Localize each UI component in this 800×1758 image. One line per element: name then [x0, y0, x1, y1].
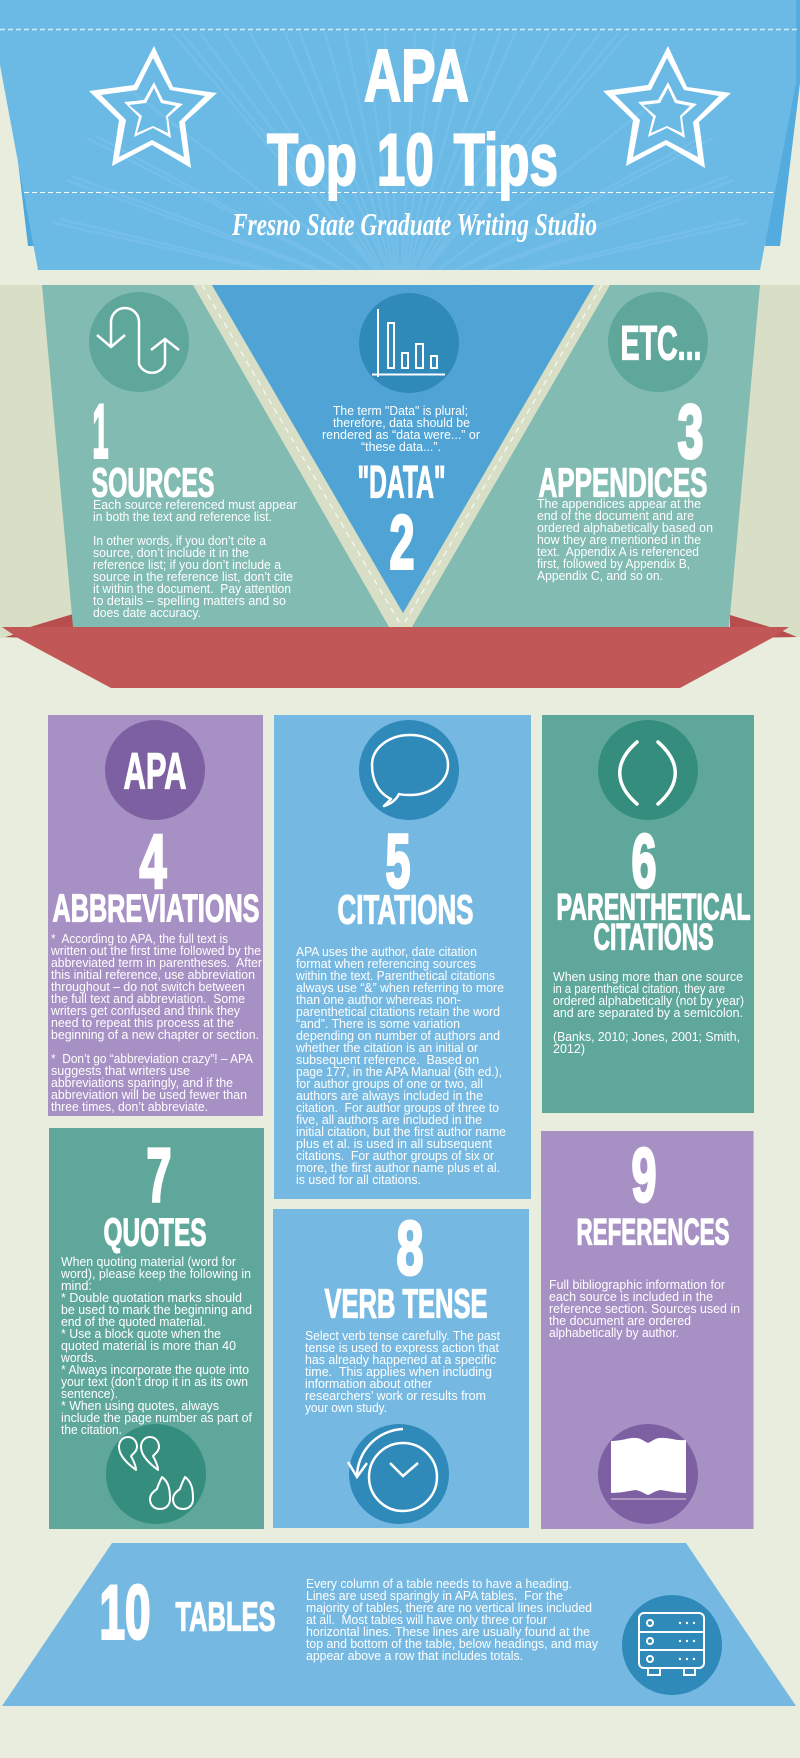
title: APA: APA	[364, 34, 469, 117]
text: abbreviations body: abbreviated term in parentheses. After	[51, 955, 263, 970]
number 4: 4	[140, 820, 166, 904]
title: Top 10 Tips: Top 10 Tips	[267, 120, 558, 201]
text: citations body: parenthetical citations retain the word	[296, 1004, 500, 1019]
text: parenthetical body: ordered alphabetically (not by year)	[553, 993, 744, 1008]
icon: right star	[603, 46, 731, 168]
text: abbreviations body: * Don’t go “abbreviation crazy”! – APA	[51, 1051, 253, 1066]
text: verb tense body: Select verb tense carefully. The past	[305, 1328, 500, 1343]
text: appendices body: end of the document and are	[537, 508, 694, 523]
heading: citations: CITATIONS	[338, 886, 474, 932]
text: references body: reference section. Sources used in	[549, 1301, 740, 1316]
heading: abbreviations: ABBREVIATIONS	[52, 888, 260, 930]
icon: clock with arrow	[348, 1424, 449, 1524]
text: quotes body: When quoting material (word for	[61, 1254, 237, 1269]
text: appendices body: The appendices appear at the	[537, 496, 701, 511]
text: verb tense body	[305, 1328, 500, 1415]
panel: tips 1 to 3: 1	[92, 390, 108, 474]
text: abbreviations body: abbreviations sparingly, and if the	[51, 1075, 233, 1090]
text: sources body: In other words, if you don’t cite a	[93, 533, 267, 548]
text: quotes body: the citation.	[61, 1422, 122, 1437]
text: abbreviations body: the full text and abbreviation. Some	[51, 991, 245, 1006]
text: parenthetical body: in a parenthetical citation, they are	[553, 981, 725, 996]
text: parenthetical body: When using more than one source	[553, 969, 743, 984]
text: parenthetical body: and are separated by a semicolon.	[553, 1005, 743, 1020]
text: abbreviations body: abbreviation will be used fewer than	[51, 1087, 247, 1102]
heading: verb tense: VERB TENSE	[324, 1280, 488, 1326]
text: abbreviations body: beginning of a new chapter or section.	[51, 1027, 259, 1042]
text: verb tense body: researchers’ work or results from	[305, 1388, 486, 1403]
text: citations body: “and”. There is some variation	[296, 1016, 460, 1031]
text: abbreviations body: three times, don’t abbreviate.	[51, 1099, 208, 1114]
text: abbreviations body: suggests that writers use	[51, 1063, 190, 1078]
text: sources body	[93, 497, 298, 620]
text: sources body: reference list; if you don’t include a	[93, 557, 282, 572]
text: appendices body: ordered alphabetically based on	[537, 520, 713, 535]
text: sources body: source in the reference list, don’t cite	[93, 569, 293, 584]
text: citations body: citation. For author groups of three to	[296, 1100, 499, 1115]
text: citations body: depending on number of authors and	[296, 1028, 500, 1043]
number 6: 6	[632, 820, 656, 904]
text: citations body: is used for all citations.	[296, 1172, 421, 1187]
text: tables body: appear above a row that includes totals.	[306, 1648, 523, 1663]
icon: left star	[89, 46, 217, 168]
text: tables body: Every column of a table needs to have a heading.	[306, 1576, 572, 1591]
panel: red ribbon	[2, 614, 797, 688]
icon: bar chart	[359, 293, 459, 393]
text: verb tense body: time. This applies when including	[305, 1364, 492, 1379]
heading: data: "DATA"	[358, 456, 446, 508]
text: quotes body: * Use a block quote when the	[61, 1326, 221, 1341]
text: quotes body: * Always incorporate the quote into	[61, 1362, 249, 1377]
text: tables body	[306, 1576, 598, 1663]
panel: tip 8 verb tense	[273, 1206, 529, 1528]
number 3: 3	[678, 390, 704, 474]
text: citations body: for author groups of one or two, all	[296, 1076, 483, 1091]
text: quotes body: include the page number as part of	[61, 1410, 252, 1425]
text: data body	[322, 403, 481, 454]
text: sources body: does date accuracy.	[93, 605, 201, 620]
text: quotes body: * When using quotes, always	[61, 1398, 219, 1413]
text: tables body: top and bottom of the table, below headings, and may	[306, 1636, 598, 1651]
text: parenthetical body: (Banks, 2010; Jones, 2001; Smith,	[553, 1029, 740, 1044]
text: citations body: than one author whereas non-	[296, 992, 461, 1007]
text: abbreviations body: written out the first time followed by the	[50, 943, 261, 958]
text: quotes body	[60, 1254, 252, 1437]
panel: tip 7 quotes	[49, 1128, 264, 1529]
text: quotes body: words.	[60, 1350, 97, 1365]
text: references body: the document are ordered	[549, 1313, 691, 1328]
heading: appendices: APPENDICES	[538, 460, 708, 506]
panel: header banner	[0, 0, 800, 300]
text: citations body: citations. For author groups of six or	[296, 1148, 495, 1163]
heading: tables: TABLES	[176, 1594, 276, 1640]
text: citations body: within the text. Parenthetical citations	[295, 968, 495, 983]
text: data body: The term "Data" is plural;	[333, 403, 468, 418]
icon: etc: ETC...	[620, 318, 702, 370]
text: quotes body: your text (don’t drop it in as its own	[61, 1374, 248, 1389]
subtitle: Fresno State Graduate Writing Studio	[231, 206, 597, 242]
text: citations body: subsequent reference. Based on	[296, 1052, 479, 1067]
text: citations body: always use “&” when referring to more	[296, 980, 504, 995]
text: references body: Full bibliographic information for	[549, 1277, 726, 1292]
icon: APA badge	[105, 720, 205, 820]
text: sources body: Each source referenced must appear	[93, 497, 298, 512]
number 8: 8	[396, 1206, 424, 1292]
text: tables body: at all. Most tables will have only three or four	[306, 1612, 548, 1627]
text: sources body: to details – spelling matters and so	[93, 593, 286, 608]
text: abbreviations body: * According to APA, the full text is	[51, 931, 228, 946]
text: verb tense body: information about other	[305, 1376, 433, 1391]
heading: parenthetical citations: CITATIONS	[594, 916, 714, 958]
text: quotes body: be used to mark the beginning and	[61, 1302, 252, 1317]
panel: tip 9 references	[541, 1131, 754, 1529]
number 5: 5	[386, 820, 410, 904]
text: appendices body: first, followed by Appendix B,	[537, 556, 690, 571]
icon: speech bubble	[359, 720, 459, 820]
text: tables body: majority of tables, there are no vertical lines included	[306, 1600, 592, 1615]
panel: tip 6 parenthetical citations	[542, 715, 754, 1113]
text: appendices body	[537, 496, 713, 583]
text: references body: alphabetically by author.	[549, 1325, 679, 1340]
text: quotes body: * Double quotation marks should	[61, 1290, 242, 1305]
text: citations body: APA uses the author, date citation	[296, 944, 477, 959]
text: citations body: authors are always included in the	[296, 1088, 483, 1103]
text: sources body: it within the document. Pay attention	[93, 581, 291, 596]
text: data body: rendered as “data were...” or	[322, 427, 481, 442]
text: citations body: whether the citation is an initial or	[295, 1040, 479, 1055]
text: abbreviations body: throughout – do not switch between	[51, 979, 245, 994]
text: quotes body: word), please keep the following in	[60, 1266, 251, 1281]
number 7: 7	[146, 1134, 172, 1218]
text: abbreviations body: writers get confused and think they	[50, 1003, 240, 1018]
heading: quotes: QUOTES	[104, 1212, 206, 1254]
text: verb tense body: your own study.	[305, 1400, 387, 1415]
text: sources body: source, don’t include it in the	[93, 545, 249, 560]
icon: open book	[598, 1424, 698, 1524]
icon: etc	[608, 292, 708, 392]
panel: tip 5 citations	[274, 715, 531, 1199]
text: data body: therefore, data should be	[333, 415, 470, 430]
panel: tip 4 abbreviations	[48, 715, 263, 1116]
panel: side backing strips	[0, 285, 800, 638]
heading: sources: SOURCES	[92, 460, 214, 506]
text: appendices body: Appendix C, and so on.	[537, 568, 663, 583]
text: tables body: horizontal lines. These lines are usually found at the	[306, 1624, 590, 1639]
panel: tips 1 to 3	[42, 285, 760, 627]
text: appendices body: text. Appendix A is referenced	[537, 544, 699, 559]
text: parenthetical body: 2012)	[553, 1041, 585, 1056]
number 2: 2	[390, 500, 414, 586]
icon: server stack	[622, 1595, 722, 1695]
icon: sources arrows	[89, 292, 189, 392]
text: verb tense body: has already happened at a specific	[305, 1352, 496, 1367]
text: citations body: page 177, in the APA Manual (6th ed.),	[296, 1064, 502, 1079]
text: abbreviations body: this initial reference, use abbreviation	[51, 967, 255, 982]
text: parenthetical body	[553, 969, 744, 1056]
text: abbreviations body: need to repeat this process at the	[51, 1015, 234, 1030]
text: citations body	[295, 944, 506, 1187]
icon: quotation marks	[106, 1424, 206, 1524]
number 9: 9	[632, 1134, 656, 1218]
text: verb tense body: tense is used to express action that	[305, 1340, 499, 1355]
text: sources body: in both the text and reference list.	[93, 509, 272, 524]
text: references body	[549, 1277, 740, 1340]
text: quotes body: quoted material is more than 40	[61, 1338, 236, 1353]
text: quotes body: sentence).	[61, 1386, 118, 1401]
text: citations body: format when referencing sources	[296, 956, 476, 971]
text: citations body: five, all authors are included in the	[296, 1112, 482, 1127]
text: data body: “these data...”.	[361, 439, 441, 454]
text: quotes body: end of the quoted material.	[61, 1314, 206, 1329]
text: citations body: plus et al. is used in all subsequent	[296, 1136, 492, 1151]
text: references body: each source is included in the	[549, 1289, 713, 1304]
text: quotes body: mind:	[61, 1278, 92, 1293]
heading: parenthetical citations	[556, 886, 750, 958]
text: abbreviations body	[50, 931, 263, 1114]
text: citations body: more, the first author name plus et al.	[296, 1160, 500, 1175]
number 10: 10	[100, 1570, 150, 1656]
icon: APA badge: APA	[124, 742, 186, 800]
text: appendices body: how they are mentioned in the	[537, 532, 701, 547]
panel: tip 10 tables	[2, 1543, 796, 1706]
sunburst rays	[54, 33, 746, 300]
text: tables body: Lines are used sparingly in APA tables. For the	[306, 1588, 563, 1603]
icon: parentheses	[598, 720, 698, 820]
text: citations body: initial citation, but the first author name	[296, 1124, 506, 1139]
